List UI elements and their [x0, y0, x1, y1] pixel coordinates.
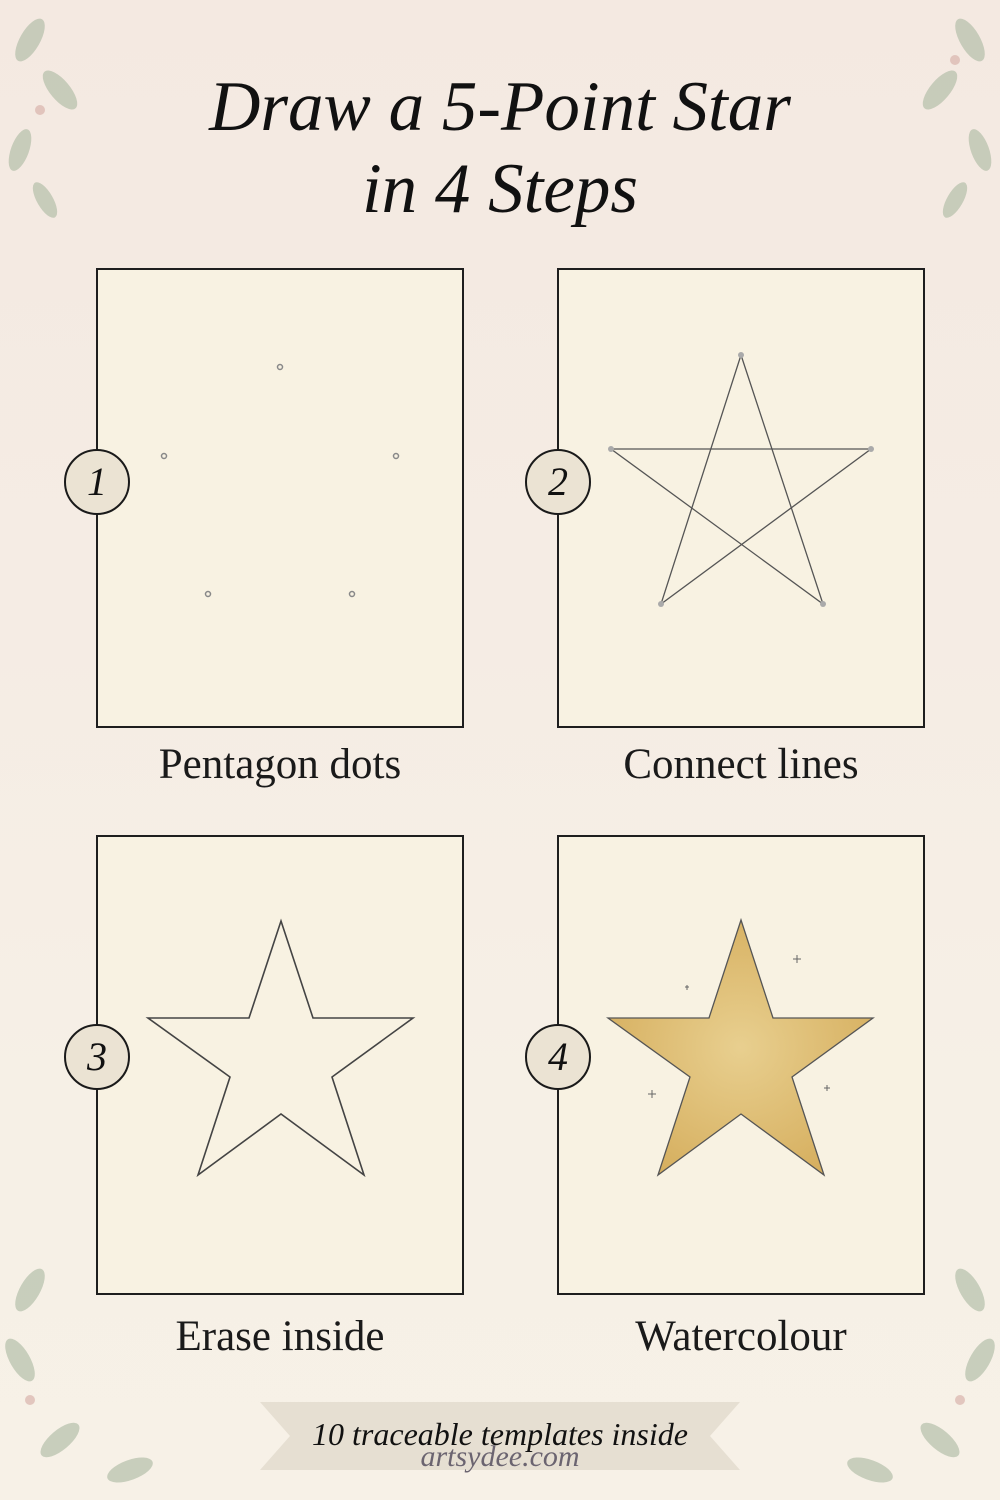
label: step 4: Watercolour [635, 1313, 847, 1360]
title [208, 68, 792, 228]
badge: step 4 [525, 1024, 591, 1090]
title: in 4 Steps [362, 150, 638, 228]
icon: connected star lines [608, 352, 874, 607]
badge: step 3: 3 [87, 1034, 107, 1079]
panel: step 4 [557, 835, 925, 1295]
badge: step 4: 4 [548, 1034, 568, 1079]
icon: star outline [146, 918, 416, 1177]
title: Draw a 5-Point Star [209, 68, 791, 146]
label: step 2: Connect lines [623, 741, 859, 788]
label: step 1: Pentagon dots [159, 741, 401, 788]
panel: step 2 [557, 268, 925, 728]
badge: step 1 [64, 449, 130, 515]
panel: step 3 [96, 835, 464, 1295]
badge: step 2 [525, 449, 591, 515]
icon: pentagon dots [160, 364, 400, 598]
badge: step 1: 1 [87, 459, 107, 504]
banner [260, 1402, 740, 1470]
icon: watercolour star [606, 918, 875, 1177]
banner text: 10 traceable templates inside [312, 1416, 688, 1452]
badge: step 2: 2 [548, 459, 568, 504]
panel: step 1 [96, 268, 464, 728]
label: step 3: Erase inside [176, 1313, 384, 1360]
watermark: artsydee.com [420, 1440, 580, 1473]
badge: step 3 [64, 1024, 130, 1090]
